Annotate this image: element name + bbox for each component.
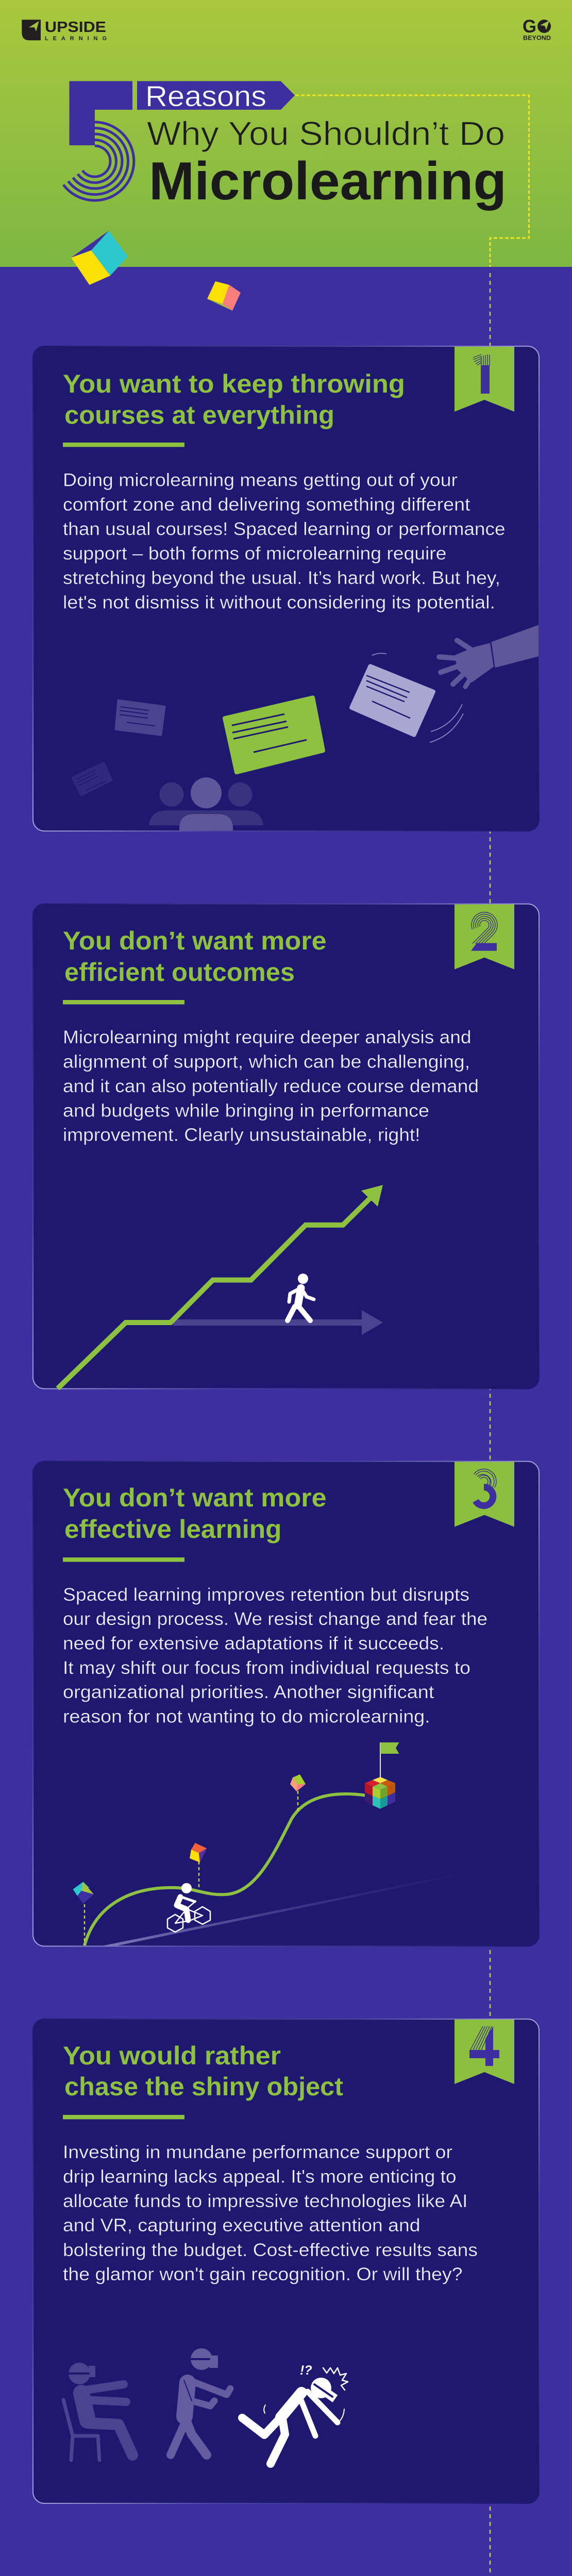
ribbon: number 2 (455, 905, 514, 970)
body text: allocate funds to impressive technologies like AI (63, 2191, 468, 2211)
illustration: falling VR user (242, 2363, 348, 2464)
icon: milestone cube 2 (190, 1843, 207, 1862)
illustration: slope (102, 1873, 460, 1946)
body text: and VR, capturing executive attention and (63, 2215, 420, 2235)
body text (63, 470, 505, 613)
panel: reason 4 (33, 2019, 539, 2503)
illustration: standing VR user (171, 2348, 230, 2455)
body text: drip learning lacks appeal. It's more enticing to (63, 2167, 457, 2187)
body text: stretching beyond the usual. It’s hard work. But hey, (63, 568, 500, 588)
body text: Doing microlearning means getting out of your (63, 470, 458, 490)
header background (0, 0, 572, 267)
logo: Go Beyond: BEYOND (523, 34, 551, 41)
body text: than usual courses! Spaced learning or performance (63, 519, 505, 539)
heading: chase the shiny object (64, 2072, 343, 2101)
heading (63, 2041, 343, 2101)
illustration: green card (225, 698, 323, 772)
body text: and it can also potentially reduce course demand (63, 1076, 479, 1096)
chart: flat grey arrow (173, 1310, 383, 1335)
illustration: seated VR user (63, 2363, 132, 2460)
panel: reason 3 (33, 1461, 539, 1946)
heading: You would rather (63, 2041, 281, 2070)
title: Why You Shouldn't Do: Why You Shouldn’t Do (147, 114, 505, 152)
panel: reason 1 (33, 346, 539, 831)
icon: cyclist (167, 1883, 210, 1932)
body text: Spaced learning improves retention but disrupts (63, 1585, 469, 1605)
logo: Upside Learning: LEARNING (45, 36, 107, 42)
heading underline (63, 443, 184, 447)
title banner: Reasons: Reasons (145, 80, 266, 113)
icon: multicolour cube (365, 1777, 395, 1809)
icon: goal flag (380, 1742, 399, 1778)
heading underline (63, 1000, 184, 1005)
icon: milestone cube 3 (290, 1774, 306, 1791)
ribbon: number 1 (455, 347, 514, 412)
heading underline (63, 1557, 184, 1562)
body text: the glamor won't gain recognition. Or will they? (63, 2264, 463, 2284)
body text: let's not dismiss it without considering its potential. (63, 592, 495, 613)
body text: alignment of support, which can be challenging, (63, 1052, 470, 1072)
heading: You want to keep throwing (63, 369, 405, 398)
body text: Microlearning might require deeper analysis and (63, 1027, 472, 1047)
logo: Go Beyond: G (523, 16, 536, 37)
body text: organizational priorities. Another significant (63, 1682, 434, 1702)
body text: and budgets while bringing in performance (63, 1101, 429, 1121)
body text (63, 2142, 478, 2284)
heading: You don’t want more (63, 926, 327, 955)
chart: rising green arrow (58, 1185, 383, 1388)
body text: comfort zone and delivering something different (63, 495, 470, 515)
illustration: faintest card (73, 763, 111, 795)
heading (63, 369, 405, 430)
logo: Upside Learning: UPSIDE (45, 19, 106, 36)
body text (63, 1027, 479, 1145)
body text: It may shift our focus from individual requests to (63, 1658, 470, 1678)
body text: support – both forms of microlearning require (63, 544, 446, 564)
heading: You don’t want more (63, 1483, 327, 1512)
logo: Upside Learning (22, 19, 107, 42)
illustration: audience (149, 777, 263, 831)
big numeral 5 (63, 81, 134, 200)
heading (63, 1483, 327, 1544)
body text: reason for not wanting to do microlearning. (63, 1706, 430, 1727)
heading underline (63, 2115, 184, 2120)
illustration: milestone poles (85, 1791, 298, 1945)
illustration: winding green path (85, 1794, 366, 1945)
body text: our design process. We resist change and fear the (63, 1609, 487, 1629)
heading: efficient outcomes (64, 958, 295, 987)
heading: courses at everything (64, 401, 334, 430)
title: Microlearning: Microlearning (149, 151, 507, 211)
illustration: light card (351, 666, 433, 735)
icon: milestone cube 1 (73, 1882, 94, 1904)
icon: walking person (288, 1274, 314, 1320)
body text: Investing in mundane performance support or (63, 2142, 452, 2162)
ribbon: number 4 (455, 2020, 514, 2084)
illustration: faded card (116, 701, 164, 735)
illustration: falling VR user: !? (300, 2363, 312, 2378)
body text: improvement. Clearly unsustainable, right! (63, 1125, 420, 1145)
panel: reason 2 (33, 904, 539, 1389)
dashed connector path (295, 95, 529, 2576)
body text: need for extensive adaptations if it succeeds. (63, 1633, 444, 1654)
body text (63, 1585, 487, 1727)
heading: effective learning (64, 1515, 281, 1544)
icon: small cube (207, 281, 241, 311)
body text: bolstering the budget. Cost-effective results sans (63, 2240, 478, 2260)
ribbon: number 3 (455, 1462, 514, 1527)
illustration: hand throwing (372, 625, 539, 742)
heading (63, 926, 327, 987)
icon: large cube (71, 231, 128, 285)
logo: Go Beyond (523, 16, 551, 41)
